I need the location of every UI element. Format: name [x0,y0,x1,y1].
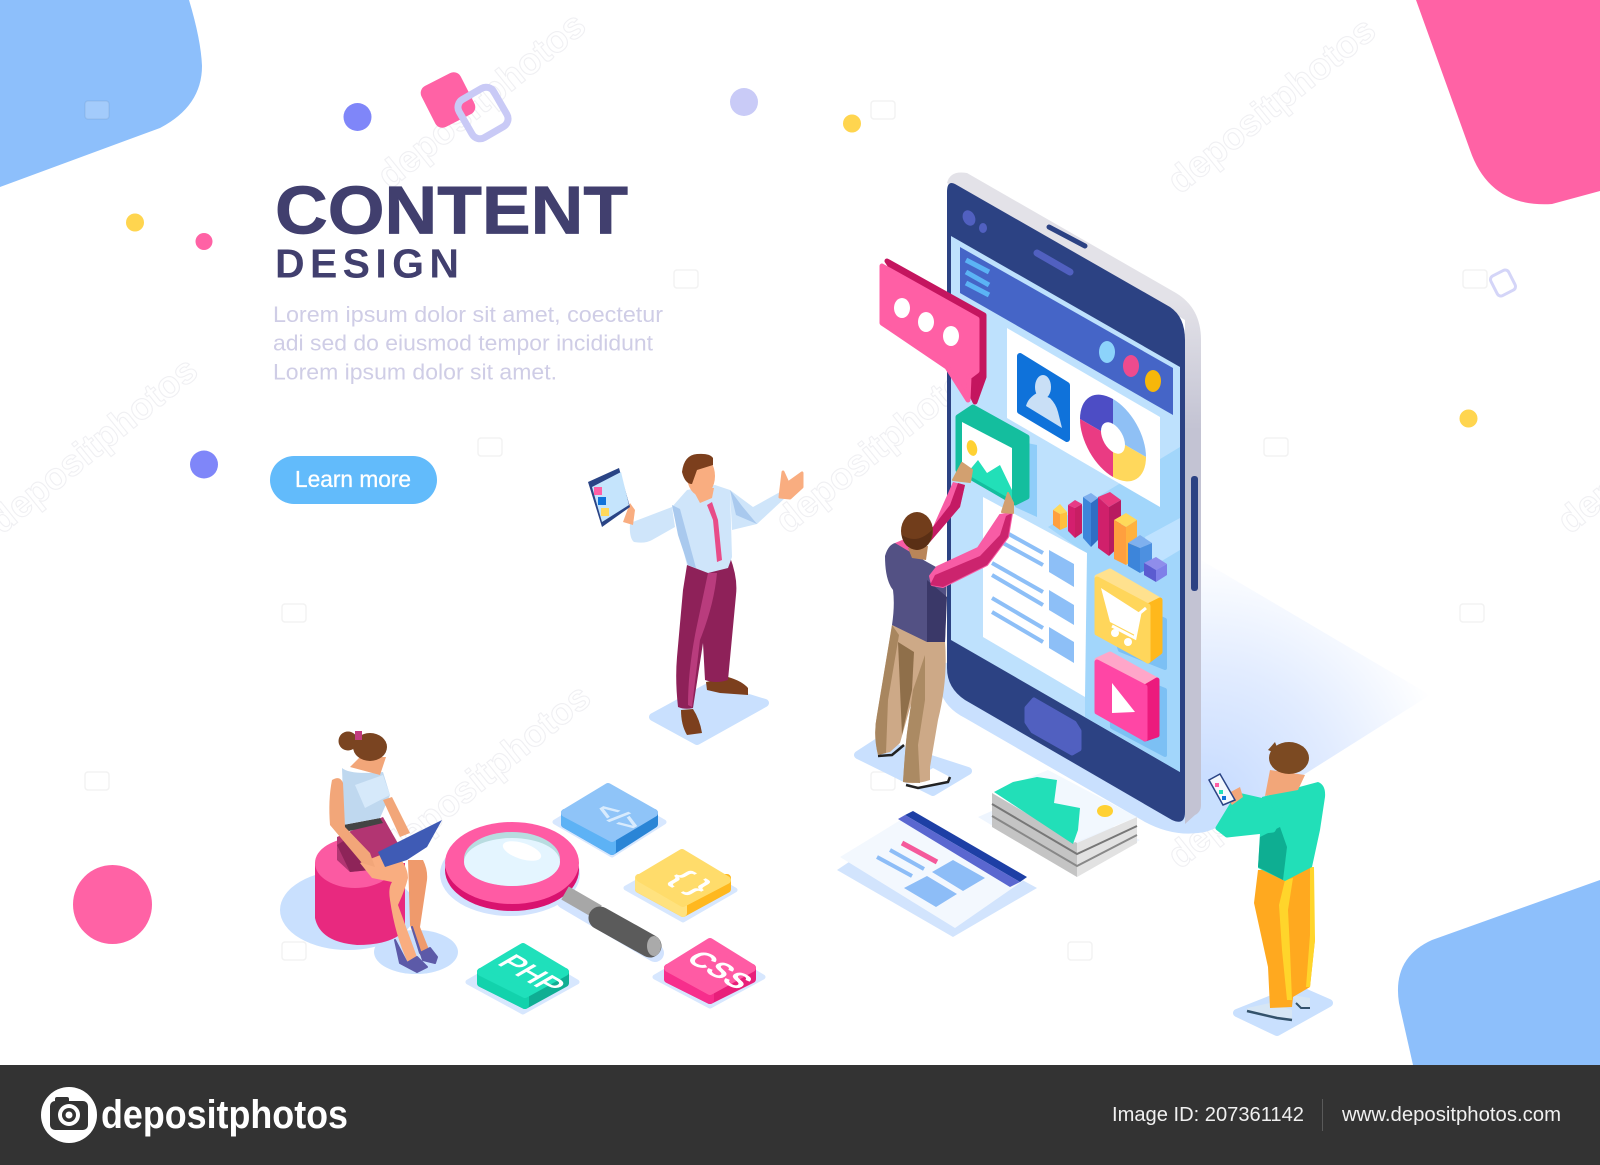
button: learn more: Learn more [295,466,411,492]
shoes [395,940,427,972]
stack of photos [978,770,1140,877]
speaker and notch [960,208,1085,272]
head [908,546,928,560]
tile: CSS [655,942,763,1006]
watermark text: depositphotos [374,676,598,868]
head [687,456,715,496]
tile: curly braces: { } [662,865,720,899]
floor tile [858,742,968,792]
near arm [930,513,1012,587]
shirt [672,485,732,573]
person: man with tablet [588,454,802,741]
document on the floor [837,811,1037,937]
person: man with smartphone [1209,742,1329,1032]
side button [1191,476,1198,591]
footer image id: Image ID: 207361142 [1112,1104,1304,1126]
tile: CSS: CSS [678,947,760,994]
chart: donut [1080,380,1146,496]
text document panel [983,497,1087,697]
shoes [878,745,950,788]
head [350,757,386,775]
footer logo: depositphotos [101,1093,348,1137]
home button [1027,700,1079,753]
footer website: www.depositphotos.com [1341,1104,1561,1126]
icon: play tile [1097,654,1165,755]
legs [408,860,430,955]
person: man touching the screen [858,463,1013,792]
magnifying glass [440,822,661,956]
arms [630,507,675,543]
title: CONTENT [275,172,628,248]
decorative blob: top right [1416,0,1600,204]
trousers [875,625,925,755]
tile: PHP [468,947,577,1012]
watermark text: depositphotos [767,349,991,541]
icon: overlapping squares [418,70,511,142]
far arm [895,482,965,560]
body text: Lorem ipsum dolor sit amet, coectetur [273,302,663,327]
shoes [1247,995,1310,1020]
decorative blob: bottom right [1398,880,1600,1065]
tile: code tags [555,787,664,855]
footer bar [0,1065,1600,1165]
body text: Lorem ipsum dolor sit amet. [273,360,557,384]
watermark text: depositphotos [369,4,593,196]
skirt [337,817,400,872]
tile: curly braces [626,853,735,920]
icon: small outlined square [1489,269,1517,297]
watermark text: depositphotos [1159,684,1383,876]
subtitle: DESIGN [275,240,459,286]
icon: profile card [1020,356,1067,439]
phone glow and floor shadow [940,560,1430,834]
screen [951,236,1180,772]
white content panel [1007,328,1160,507]
arms [329,778,375,867]
app header bar [960,247,1173,415]
head [1265,770,1305,796]
trousers [1254,867,1315,1008]
person: woman on pouf [280,731,458,974]
top [342,768,390,825]
phone [947,172,1201,824]
shadow [565,900,655,953]
handle [565,893,598,912]
footer logo [41,1087,348,1143]
lens [464,832,560,886]
watermark camera icons [85,101,1487,960]
decorative blob: top left [0,0,202,187]
tile: PHP: PHP [490,951,572,998]
speech bubble [882,261,984,402]
tile: code tags: </> [586,799,650,836]
body text: adi sed do eiusmod tempor incididunt [273,330,653,356]
tablet [588,468,630,527]
trousers [676,557,736,709]
rim [445,829,579,911]
sweater [1258,782,1325,881]
chart: 3d bars [1053,492,1167,582]
shoes [706,677,748,695]
hands [953,463,972,482]
sweater [885,543,947,642]
icon: shopping cart tile [1097,571,1165,668]
decorative dots [73,88,1478,944]
laptop [378,820,442,867]
arm [1218,795,1280,835]
hand and phone [1225,787,1243,805]
icon: image tile [958,407,1037,517]
body text [273,302,663,384]
phone body side [947,172,1201,824]
watermark text: depositphotos [1159,9,1383,201]
floor tile [1237,989,1329,1032]
floor shadow [280,870,416,950]
pouf [315,863,405,945]
floor tile [653,686,765,741]
hands [780,472,802,498]
tie [707,502,722,562]
button: learn more [270,456,437,504]
phone face [947,183,1185,822]
watermark text [0,4,1600,876]
